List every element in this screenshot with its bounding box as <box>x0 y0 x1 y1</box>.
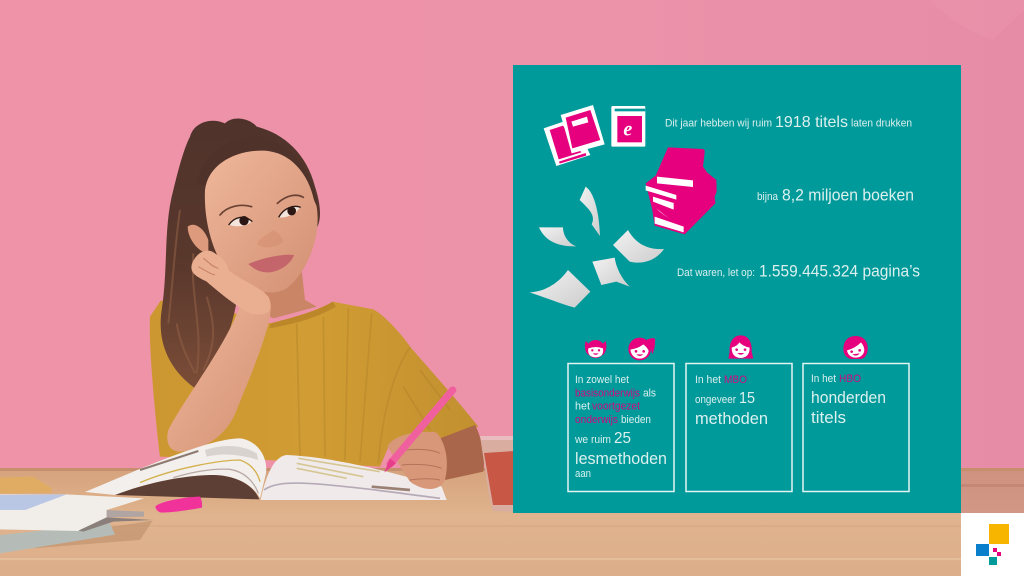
icon: girl with long hair <box>728 335 753 359</box>
icon: stack of books <box>646 147 717 234</box>
icon: girl with pigtails <box>585 340 606 358</box>
text: books: 8,2 miljoen boeken <box>782 186 914 204</box>
left eye <box>229 216 252 226</box>
box: HBO: titels <box>811 409 846 427</box>
stack of books on table <box>0 477 153 553</box>
box: HBO: honderden <box>811 389 886 407</box>
box: MBO: ongeveer <box>695 394 736 406</box>
box: primary and secondary education: bieden <box>621 414 651 426</box>
box: MBO: In het <box>695 374 721 386</box>
eyebrows <box>220 195 303 215</box>
teal panel <box>513 65 961 513</box>
right eye <box>279 206 301 217</box>
lips <box>248 255 294 272</box>
icon: e-book <box>611 106 645 147</box>
box: MBO: methoden <box>695 410 768 428</box>
box: HBO: In het <box>811 373 836 385</box>
icon: flying pages <box>530 187 664 308</box>
text: books: bijna <box>757 191 779 203</box>
icon: e-book: e <box>623 118 632 140</box>
right forearm <box>440 425 484 480</box>
logo <box>961 513 1024 576</box>
hair over forehead <box>197 137 318 210</box>
text: titles: 1918 titels <box>775 114 848 131</box>
box: primary and secondary education: als <box>643 388 656 400</box>
box: primary and secondary education: aan <box>575 468 591 480</box>
box: primary and secondary education: we ruim <box>574 434 611 446</box>
glass of juice <box>480 436 514 512</box>
neck <box>263 270 317 318</box>
box: primary and secondary education: 25 <box>614 430 631 447</box>
open book <box>85 438 447 500</box>
shirt ribs <box>297 308 450 463</box>
left arm <box>167 307 271 452</box>
text: titles: laten drukken <box>851 118 912 130</box>
box: primary and secondary education: In zowel het <box>575 374 629 386</box>
box: primary and secondary education: onderwijs <box>575 414 618 426</box>
text: titles: Dit jaar hebben wij ruim <box>665 118 772 130</box>
pink marker on table <box>155 497 202 513</box>
text: pages: 1.559.445.324 pagina’s <box>759 262 920 280</box>
box: MBO: 15 <box>739 390 755 407</box>
icon: girl with side fringe <box>843 336 868 359</box>
hair <box>161 119 320 388</box>
girl with book <box>85 119 484 500</box>
box: MBO <box>686 364 792 492</box>
icon: two books <box>544 105 605 166</box>
face <box>205 151 318 292</box>
box: primary and secondary education <box>568 364 674 492</box>
hair highlights <box>168 210 213 373</box>
neckline <box>269 302 336 328</box>
box: MBO: MBO <box>724 374 747 386</box>
hand on cheek <box>191 251 271 315</box>
nose <box>257 230 283 247</box>
box: primary and secondary education: basisonderwijs <box>575 388 640 400</box>
writing hand <box>387 432 447 489</box>
ear <box>188 225 208 253</box>
shirt <box>150 301 478 467</box>
text: pages <box>677 262 920 280</box>
box: primary and secondary education: lesmethoden <box>575 450 667 468</box>
text: pages: Dat waren, let op: <box>677 267 755 279</box>
box: HBO <box>803 364 909 492</box>
box: primary and secondary education: het <box>575 400 590 412</box>
icon: girl with ponytail <box>628 338 655 360</box>
box: HBO: HBO <box>839 373 861 385</box>
text: titles <box>665 114 912 131</box>
pink pen <box>384 390 453 472</box>
wooden table <box>0 468 1024 576</box>
box: primary and secondary education: voortgezet <box>592 400 640 412</box>
